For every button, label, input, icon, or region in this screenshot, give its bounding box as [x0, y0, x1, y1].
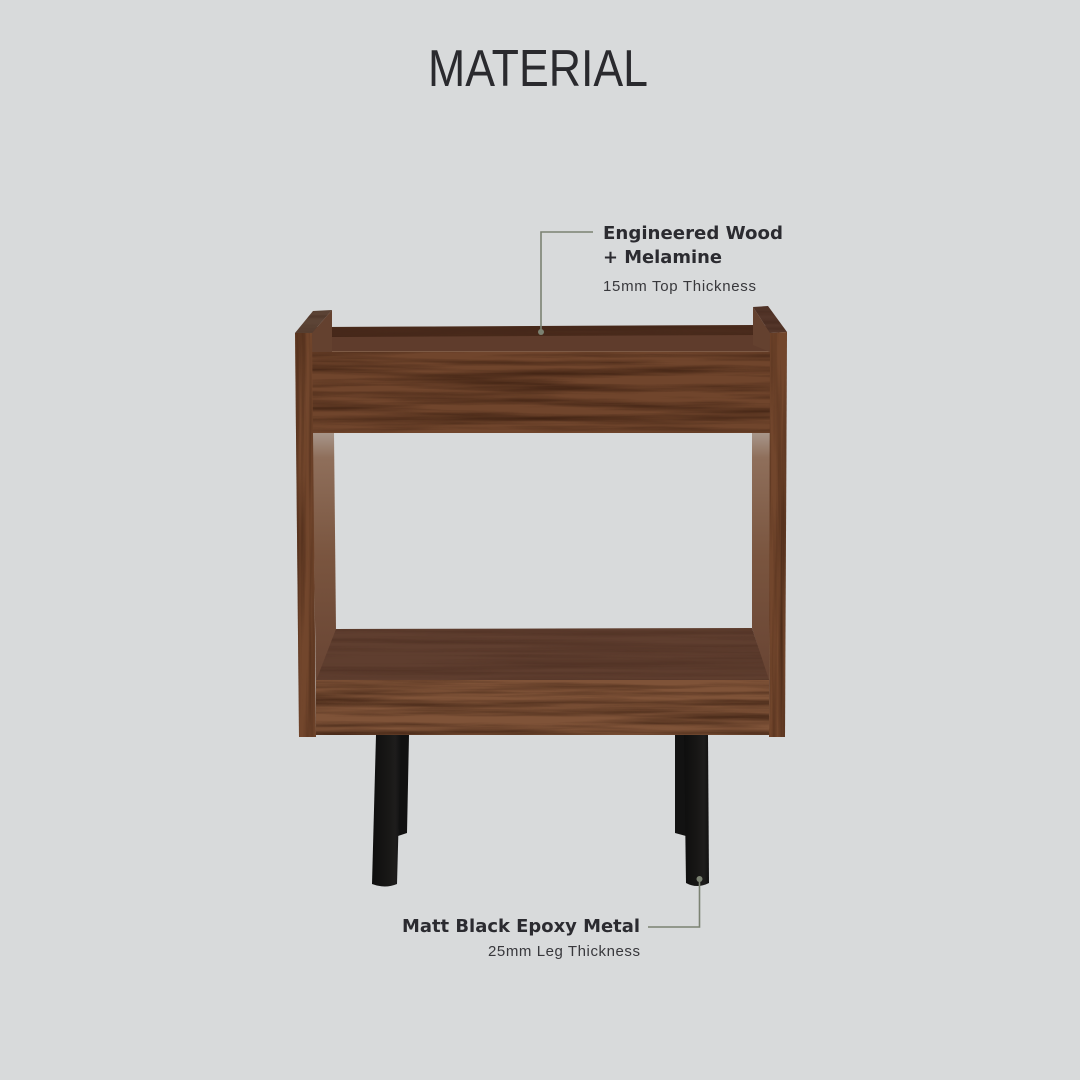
callout: top material label: + Melamine: [603, 247, 722, 268]
right side panel: [753, 306, 787, 737]
callout: bottom material label: Matt Black Epoxy Metal: [402, 916, 640, 937]
upper box front: [312, 352, 771, 433]
side table product: [295, 306, 787, 886]
callout: top material label: Engineered Wood: [603, 223, 783, 244]
back legs: [398, 735, 686, 836]
callout: top leader line: [538, 232, 593, 335]
lower shelf front: [316, 680, 769, 735]
callout: bottom leader line: [648, 876, 702, 927]
callout: top material label: [603, 223, 783, 295]
front legs: [372, 735, 709, 886]
left side panel: [295, 310, 332, 737]
callout: top material label: 15mm Top Thickness: [603, 278, 756, 295]
left panel inner side: [312, 433, 336, 682]
title: MATERIAL: [428, 40, 648, 98]
lower shelf top surface: [316, 628, 769, 681]
upper box top surface: [312, 325, 770, 352]
callout: bottom material label: [402, 916, 640, 960]
right panel inner side: [752, 433, 771, 682]
callout: bottom material label: 25mm Leg Thickness: [488, 943, 640, 960]
